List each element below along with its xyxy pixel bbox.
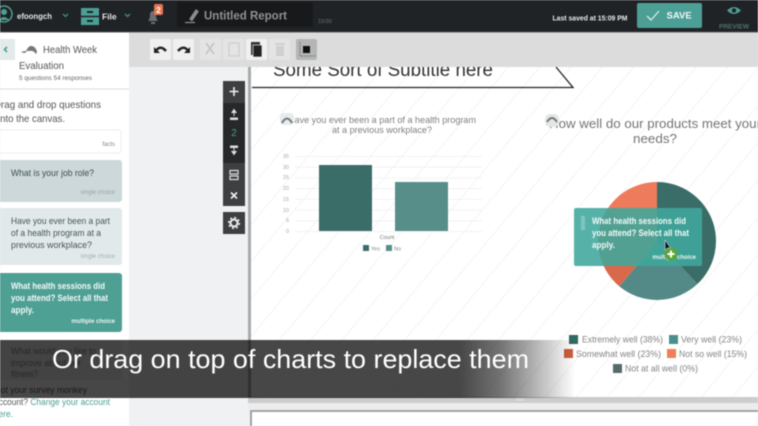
button: cut [200,39,221,60]
card: facts [0,130,121,153]
bar chart: health program: 15 [283,197,289,203]
pie chart legend: Somewhat well (23%) [576,349,661,360]
icon: chevron [63,14,68,16]
bar chart: health program: Yes [371,246,380,252]
bar chart: health program: Have you ever been a part of a health program [288,115,476,126]
save button [637,3,702,28]
card: improve: fitness? [11,369,38,380]
card: improve: improve about our [11,358,81,369]
caption band [0,340,575,398]
card: improve [0,340,122,380]
card: facts: facts [102,142,115,148]
dragged card: multiple choice [652,255,697,261]
account note [0,385,110,419]
card: previous workplace: of a health program at a [11,228,102,239]
card: health sessions selected: apply. [11,305,34,316]
icon: cloud loader on bar chart title [280,113,294,125]
bar chart: health program: No [394,246,401,252]
icon: user avatar [0,6,12,22]
bar chart: health program: 30 [283,165,289,171]
icon: cloud [21,46,37,54]
last saved: Last saved at 15:09 PM [552,14,628,22]
second report page [251,411,758,426]
page number: 2 [231,128,237,139]
pie chart title: needs? [633,131,677,146]
file menu: File [102,12,117,22]
panel: top bar [0,0,758,32]
pie chart legend: Not at all well (0%) [625,364,698,374]
bar chart: health program [283,115,482,252]
canvas background [129,32,758,426]
icon: drag cursor with plus [664,240,678,260]
instructions [0,99,101,125]
button: copy [223,39,244,60]
bar chart: health program: 0 [286,229,289,235]
dragged card: apply. [592,240,615,251]
survey title [19,45,98,72]
bar chart: health program: 25 [283,175,289,181]
icon: chevron [125,14,130,16]
preview button [719,7,750,30]
toolbar [129,32,758,67]
survey stats: 5 questions 54 responses [19,75,93,82]
survey title: Health Week [43,45,98,56]
card: improve: What would you like to [11,346,96,357]
preview button: PREVIEW [719,24,750,30]
instructions: into the canvas. [0,113,65,125]
icon: file cabinet [81,8,99,25]
card: previous workplace: Have you ever been a part [11,216,110,227]
subtitle banner [252,59,573,88]
bar chart: health program: 5 [286,218,289,224]
dragged card: you attend? Select all that [592,228,690,239]
dragged card: What health sessions did [592,216,686,227]
report title field [177,2,313,27]
panel: report page [248,59,758,410]
icon: notification bell: 2 [156,5,161,15]
side tools [223,81,245,206]
pie chart title [549,116,758,146]
icon: notification bell [148,4,163,24]
page drag handle [516,398,524,401]
card: previous workplace: previous workplace? [11,240,92,251]
pie chart legend [564,334,747,374]
pie chart title: How well do our products meet your [549,116,758,131]
icon: move down [230,146,238,154]
username: efoongch [17,12,52,21]
subtitle banner: Some Sort of Subtitle here [273,59,493,81]
card: health sessions selected: you attend? Select all that [11,293,109,304]
button: paste [246,39,267,60]
title character count: 15/30 [318,19,332,25]
card: previous workplace [0,208,122,265]
button: undo [150,39,171,60]
caption: Or drag on top of charts to replace them [52,344,529,374]
report title field: Untitled Report [204,8,287,22]
icon: add [230,87,238,96]
bar chart: health program: Count [380,235,395,241]
pie chart legend: Extremely well (38%) [582,334,663,346]
icon: rows [230,170,238,180]
bar chart: health program: 35 [283,154,289,160]
icon: move up [230,110,238,120]
card: job role: single choice [80,190,116,196]
button: redo [173,39,194,60]
pie chart [598,182,716,300]
card: job role: What is your job role? [11,168,94,179]
icon: cloud loader on pie chart title [545,114,559,127]
bar chart: health program: at a previous workplace? [332,125,432,136]
save button: SAVE [666,10,692,22]
panel: sidebar [0,32,129,426]
icon: close [231,192,237,198]
card: job role [0,160,122,202]
pie chart legend: Very well (23%) [681,334,742,346]
card: previous workplace: single choice [80,254,116,260]
card: health sessions selected: What health sessions did [11,281,105,292]
pie chart legend: Not so well (15%) [679,349,747,360]
dragged card [574,208,702,266]
bar chart: health program: 20 [283,186,289,192]
bar chart: health program: 10 [283,208,289,214]
card: health sessions selected [0,273,122,332]
button: delete [269,39,290,60]
button: settings [223,212,245,234]
button: layout selection [296,39,317,60]
survey title: Evaluation [19,61,64,72]
card: health sessions selected: multiple choice [71,319,116,325]
back button [0,39,15,60]
